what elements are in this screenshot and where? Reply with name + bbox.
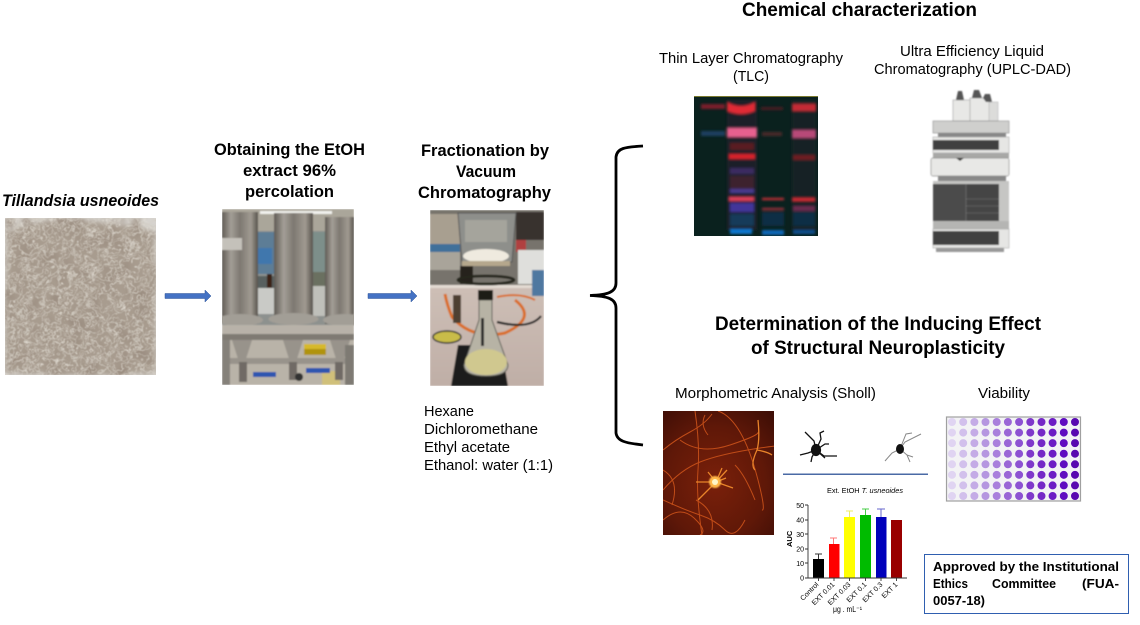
heading: vacuum chromatography: Vacuum <box>456 162 516 181</box>
label: TLC <box>659 50 843 85</box>
x labels: EXT 0.01 <box>811 581 836 607</box>
chart title: Ext. EtOH T. usneoides <box>827 486 903 495</box>
y axis ticks: 30 <box>796 532 804 539</box>
heading: EtOH extract: extract 96% <box>243 161 336 180</box>
icon: neuron silhouette treated <box>885 433 921 462</box>
callout: ethics approval: Committee <box>992 576 1056 591</box>
label: UPLC <box>874 43 1071 78</box>
photo: stainless steel percolators <box>222 209 354 385</box>
text: solvents list: Dichloromethane <box>424 421 538 438</box>
photo: Tillandsia usneoides moss <box>5 218 156 375</box>
text: solvents list: Ethyl acetate <box>424 439 510 456</box>
label: UPLC: Ultra Efficiency Liquid <box>900 43 1044 60</box>
callout: ethics approval <box>924 554 1128 614</box>
heading: EtOH extract: percolation <box>245 182 334 201</box>
curly brace <box>590 146 643 445</box>
icon: neuron silhouette control <box>800 431 837 462</box>
label: morphometric analysis: Morphometric Analysis (Sholl) <box>675 385 876 402</box>
heading: neuroplasticity <box>715 314 1042 359</box>
heading: neuroplasticity: of Structural Neuroplasticity <box>751 338 1005 359</box>
image: fluorescent neuron <box>663 411 784 535</box>
icon: UPLC instrument stack <box>931 90 1009 252</box>
text: solvents list: Ethanol: water (1:1) <box>424 457 553 474</box>
heading: EtOH extract <box>214 140 365 201</box>
heading: neuroplasticity: Determination of the Inducing Effect <box>715 314 1042 335</box>
bar chart: AUC by extract concentration <box>785 486 907 614</box>
y axis ticks: 0 <box>800 576 804 582</box>
arrow: moss to extract <box>165 290 211 302</box>
label: UPLC: Chromatography (UPLC-DAD) <box>874 61 1071 78</box>
y axis ticks: 10 <box>796 561 804 568</box>
x labels: EXT 0.03 <box>827 581 852 607</box>
axis label AUC: AUC <box>785 530 794 547</box>
y axis ticks <box>796 503 804 582</box>
y axis ticks: 50 <box>796 503 804 510</box>
callout: ethics approval: Ethics <box>933 576 968 591</box>
text: solvents list: Hexane <box>424 403 474 420</box>
axes <box>805 505 907 581</box>
text: solvents list <box>424 403 553 474</box>
heading: vacuum chromatography: Fractionation by <box>421 141 550 160</box>
x labels: Control <box>799 581 821 602</box>
callout: ethics approval: (FUA- <box>1082 576 1119 591</box>
photo: vacuum filtration flask <box>430 210 544 386</box>
label: TLC: Thin Layer Chromatography <box>659 50 843 67</box>
well plate: viability assay <box>946 417 1080 501</box>
x labels <box>799 581 899 607</box>
x axis unit: μg . mL⁻¹ <box>833 605 862 614</box>
y axis ticks: 20 <box>796 546 804 554</box>
arrow: extract to fractionation <box>368 290 417 302</box>
heading: chemical characterization: Chemical characterization <box>742 0 977 21</box>
x labels: EXT 0.3 <box>862 581 884 604</box>
error bars <box>815 509 885 560</box>
callout: ethics approval: 0057-18) <box>933 593 985 608</box>
label: viability: Viability <box>978 385 1030 402</box>
y axis ticks: 40 <box>796 518 804 524</box>
divider line <box>783 474 928 475</box>
image: TLC plate <box>694 96 818 236</box>
heading: vacuum chromatography <box>418 141 552 202</box>
x labels: EXT 1 <box>881 581 899 600</box>
heading: vacuum chromatography: Chromatography <box>418 183 552 202</box>
heading: species name: Tillandsia usneoides <box>2 191 159 210</box>
heading: EtOH extract: Obtaining the EtOH <box>214 140 365 159</box>
callout: ethics approval: Approved by the Institutional <box>933 559 1119 574</box>
bars <box>813 515 902 578</box>
label: TLC: (TLC) <box>733 68 769 85</box>
x labels: EXT 0.1 <box>846 581 868 604</box>
